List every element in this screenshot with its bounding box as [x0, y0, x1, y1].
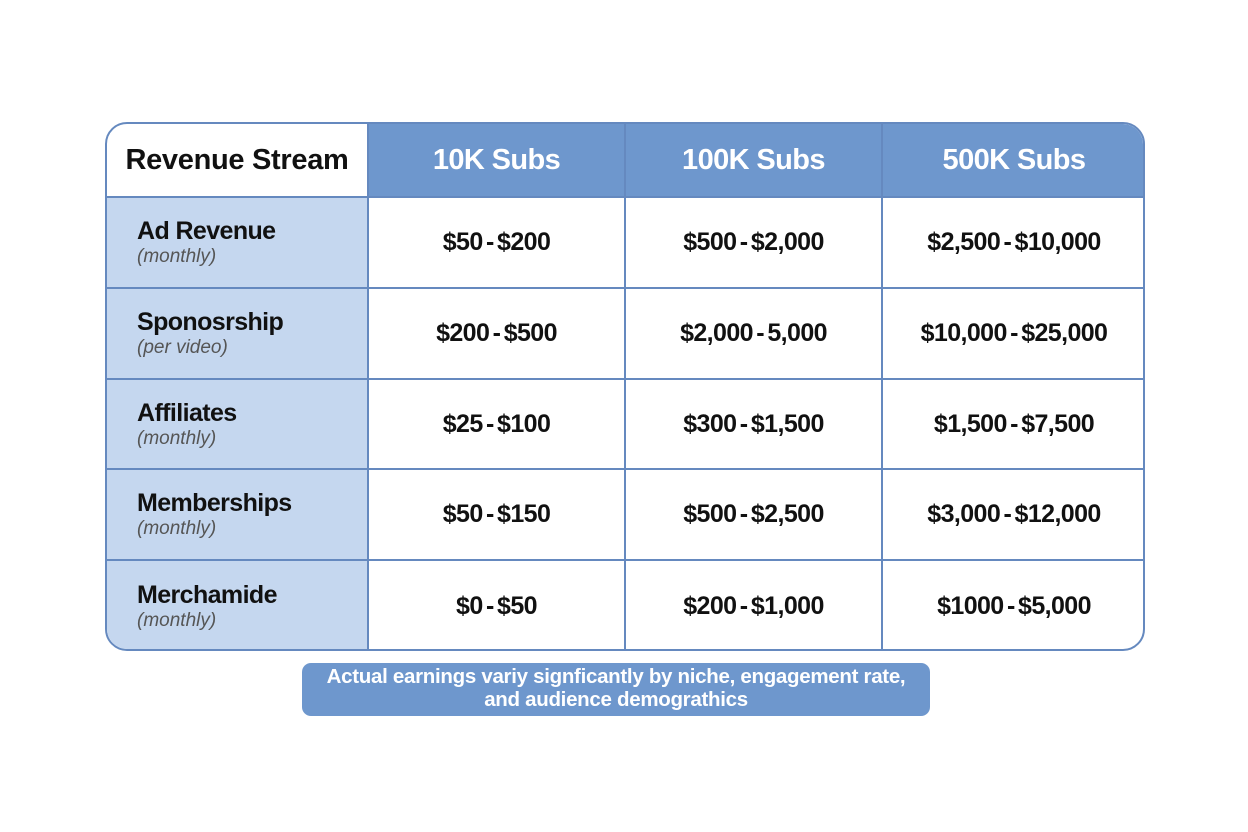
row: sponsorship: (per video)	[137, 337, 228, 358]
table: $2,000 - 5,000	[680, 319, 827, 347]
header: 500K: 500K Subs	[943, 144, 1085, 176]
row: merchandise: Merchamide	[137, 580, 277, 608]
table: $200 - $1,000	[683, 592, 824, 620]
header: 500K	[883, 124, 1145, 198]
footer note: and audience demograthics	[484, 688, 748, 711]
header: 10K: 10K Subs	[433, 144, 560, 176]
footer note	[302, 663, 930, 716]
footer note: Actual earnings variy signficantly by niche, engagement rate,	[327, 665, 905, 688]
table: $500 - $2,500	[683, 500, 824, 528]
table: $300 - $1,500	[683, 410, 824, 438]
table: $25 - $100	[443, 410, 550, 438]
row: memberships: Memberships	[137, 489, 292, 517]
row: ad revenue	[107, 198, 369, 289]
row: affiliates	[107, 380, 369, 470]
table: $50 - $200	[443, 228, 550, 256]
row: memberships: (monthly)	[137, 518, 216, 539]
table: $10,000 - $25,000	[921, 319, 1107, 347]
row: merchandise	[107, 561, 369, 651]
header: 10K	[369, 124, 626, 198]
row: affiliates: Affiliates	[137, 398, 237, 426]
table: $3,000 - $12,000	[927, 500, 1101, 528]
row: ad revenue: Ad Revenue	[137, 217, 275, 245]
table: $0 - $50	[456, 592, 537, 620]
header: revenue stream: Revenue Stream	[125, 144, 349, 176]
table: $50 - $150	[443, 500, 550, 528]
header: 100K	[626, 124, 883, 198]
header: revenue stream	[107, 124, 369, 198]
table: $2,500 - $10,000	[927, 228, 1101, 256]
row: ad revenue: (monthly)	[137, 246, 216, 267]
row: memberships	[107, 470, 369, 561]
table: $200 - $500	[436, 319, 557, 347]
row: merchandise: (monthly)	[137, 610, 216, 630]
row: sponsorship: Sponosrship	[137, 308, 283, 336]
header: 100K: 100K Subs	[682, 144, 825, 176]
table: $1000 - $5,000	[937, 592, 1091, 620]
row: sponsorship	[107, 289, 369, 380]
table: $500 - $2,000	[683, 228, 824, 256]
table: $1,500 - $7,500	[934, 410, 1094, 438]
table	[105, 122, 1145, 651]
row: affiliates: (monthly)	[137, 428, 216, 448]
